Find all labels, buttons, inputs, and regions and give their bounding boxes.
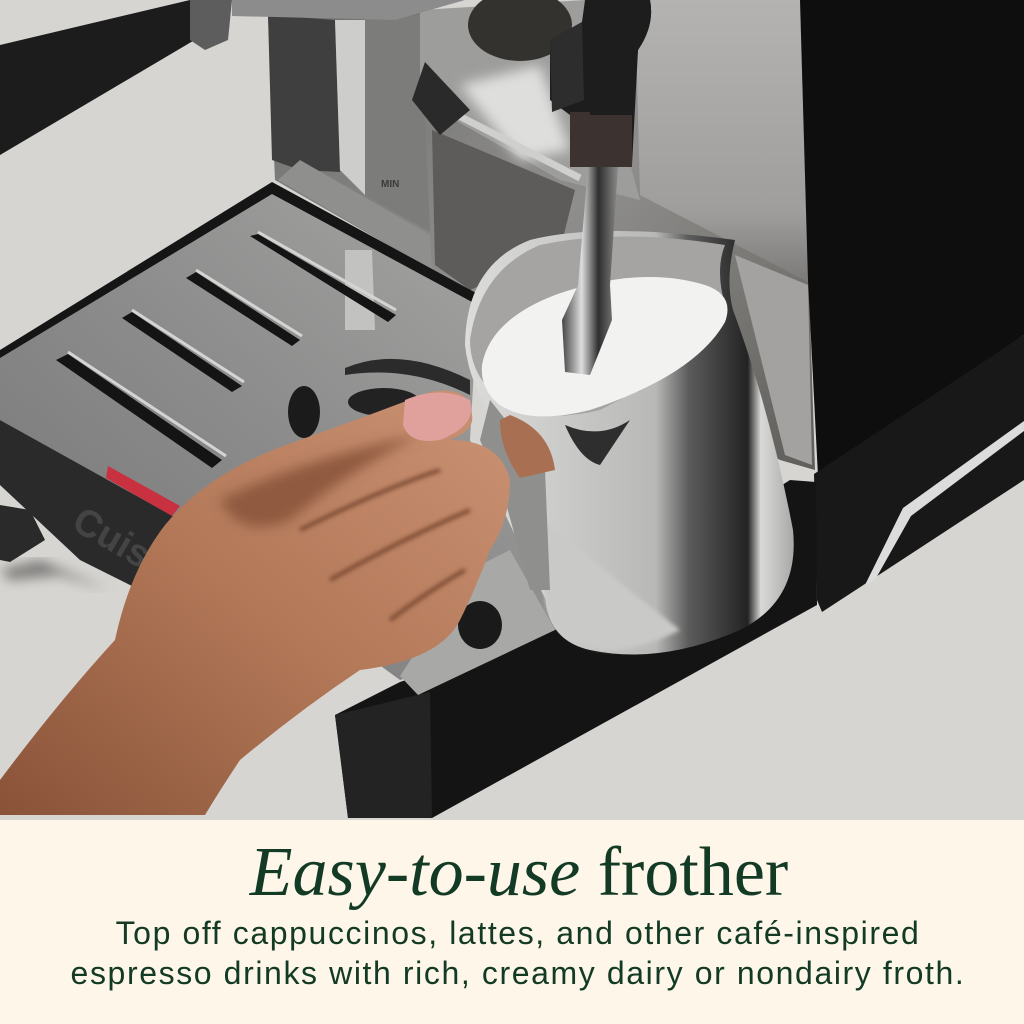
steam wand (550, 0, 651, 167)
steam tip in milk (562, 167, 618, 375)
drip tray: Cuis (66, 499, 158, 577)
drip tray (0, 182, 560, 680)
hand (0, 391, 555, 815)
caption band (0, 820, 1024, 1024)
back chrome panel: MIN (381, 179, 399, 190)
tray foot (0, 505, 45, 562)
body text: Top off cappuccinos, lattes, and other café-inspired (116, 915, 920, 951)
black machine body (800, 0, 1024, 612)
machine front base (335, 480, 817, 818)
counter shadow (0, 560, 110, 590)
back chrome panel (268, 0, 815, 470)
handle top-left (0, 0, 465, 155)
heading: Easy-to-use frother (250, 834, 788, 911)
body text: espresso drinks with rich, creamy dairy or nondairy froth. (71, 955, 965, 991)
milk pitcher (465, 231, 794, 654)
body text (71, 915, 965, 991)
